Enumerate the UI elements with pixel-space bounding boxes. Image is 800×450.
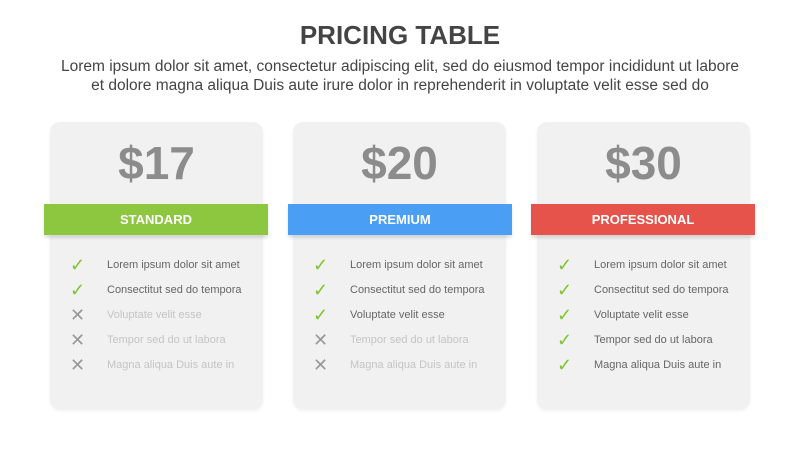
list: premium: ✕ xyxy=(313,330,328,350)
list: premium: Lorem ipsum dolor sit amet xyxy=(350,258,483,270)
title: PRICING TABLE xyxy=(300,20,500,50)
list: professional: ✓ xyxy=(557,354,572,374)
panel: standard xyxy=(50,122,263,409)
list: professional: ✓ xyxy=(557,254,572,274)
list: professional: Tempor sed do ut labora xyxy=(594,334,713,346)
list: premium: Tempor sed do ut labora xyxy=(350,334,469,346)
list: professional: Consectitut sed do tempora xyxy=(594,284,729,296)
list: professional: Magna aliqua Duis aute in xyxy=(594,358,721,370)
panel: professional xyxy=(537,122,750,409)
list: standard: Lorem ipsum dolor sit amet xyxy=(107,258,240,270)
list: premium: ✕ xyxy=(313,354,328,374)
list: standard: Voluptate velit esse xyxy=(107,308,202,320)
list: standard: ✕ xyxy=(70,330,85,350)
list: professional: ✓ xyxy=(557,330,572,350)
banner: premium xyxy=(288,204,512,235)
list: premium: Consectitut sed do tempora xyxy=(350,284,485,296)
list: standard: ✓ xyxy=(70,280,85,300)
list: premium xyxy=(313,254,485,374)
banner: standard: STANDARD xyxy=(120,212,192,227)
list: premium: ✓ xyxy=(313,254,328,274)
price: standard: $17 xyxy=(118,137,195,189)
subtitle: Lorem ipsum dolor sit amet, consectetur adipiscing elit, sed do eiusmod tempor incididunt ut labore xyxy=(61,58,739,75)
list: professional xyxy=(557,254,729,374)
list: standard: Magna aliqua Duis aute in xyxy=(107,358,234,370)
list: standard: Consectitut sed do tempora xyxy=(107,284,242,296)
list: professional: ✓ xyxy=(557,304,572,324)
list: professional: Voluptate velit esse xyxy=(594,308,689,320)
list: standard xyxy=(70,254,242,374)
list: premium: Magna aliqua Duis aute in xyxy=(350,358,477,370)
price: professional: $30 xyxy=(605,137,682,189)
list: premium: Voluptate velit esse xyxy=(350,308,445,320)
banner: professional: PROFESSIONAL xyxy=(592,212,694,227)
list: premium: ✓ xyxy=(313,280,328,300)
subtitle: et dolore magna aliqua Duis aute irure dolor in reprehenderit in voluptate velit esse sed do xyxy=(91,77,709,94)
list: standard: ✕ xyxy=(70,354,85,374)
panel: premium xyxy=(293,122,506,409)
list: professional: ✓ xyxy=(557,280,572,300)
subtitle xyxy=(61,58,739,94)
list: premium: ✓ xyxy=(313,304,328,324)
list: standard: ✕ xyxy=(70,304,85,324)
banner: premium: PREMIUM xyxy=(369,212,431,227)
banner: professional xyxy=(531,204,755,235)
price: premium: $20 xyxy=(361,137,438,189)
list: standard: Tempor sed do ut labora xyxy=(107,334,226,346)
list: professional: Lorem ipsum dolor sit amet xyxy=(594,258,727,270)
banner: standard xyxy=(44,204,268,235)
list: standard: ✓ xyxy=(70,254,85,274)
